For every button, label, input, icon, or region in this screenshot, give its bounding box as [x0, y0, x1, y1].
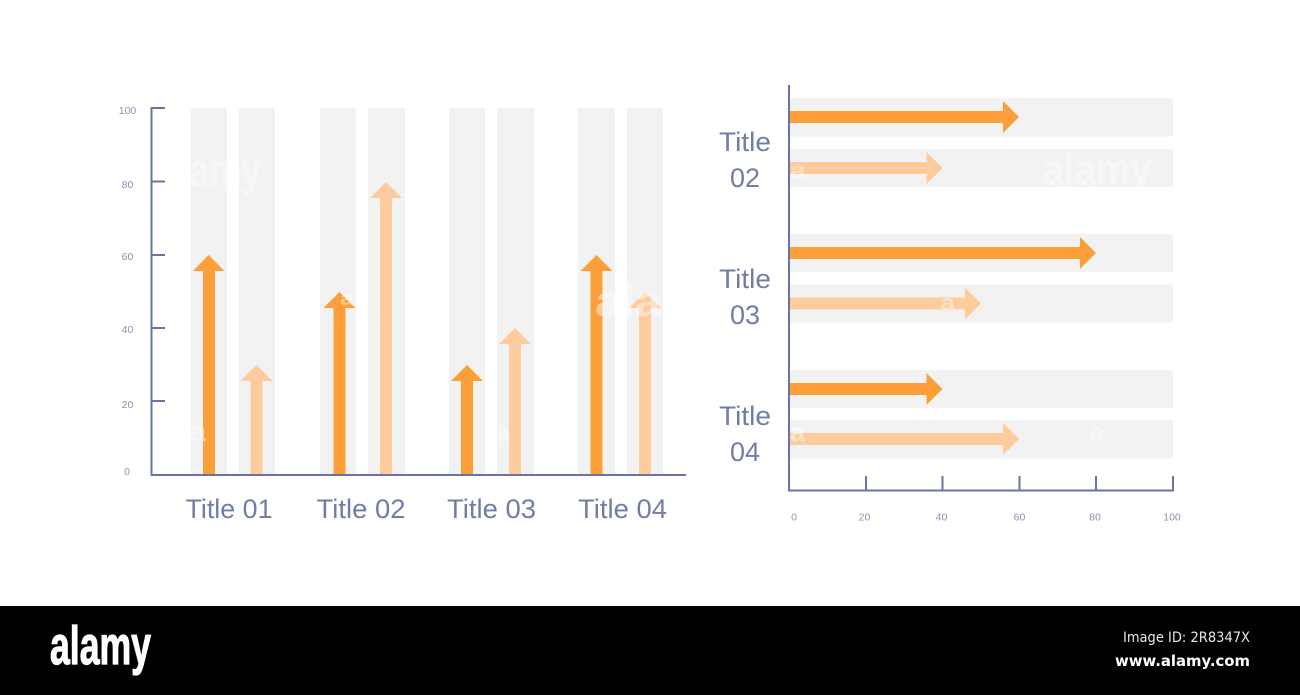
category titles: Title 04: [578, 494, 667, 524]
x axis labels: [791, 512, 1181, 524]
watermark on vertical chart: amy: [190, 144, 261, 196]
x axis labels: 0: [791, 512, 797, 524]
website: www.alamy.com: [1115, 652, 1250, 670]
x axis labels: 40: [936, 512, 947, 524]
x axis labels: 20: [859, 512, 870, 524]
x axis labels: 80: [1089, 512, 1101, 524]
dark orange arrows: [790, 101, 1096, 405]
light orange arrows: [790, 152, 1019, 455]
watermark on horizontal chart: alamy: [1042, 145, 1152, 194]
category titles: [719, 127, 771, 467]
background rows: [789, 98, 1173, 458]
watermark on horizontal chart: a: [940, 290, 956, 315]
watermark on horizontal chart: a: [790, 417, 806, 447]
y axis labels: 60: [122, 251, 133, 263]
axes: [789, 85, 1173, 490]
category titles: Title: [719, 127, 771, 157]
image id: Image ID: 2R8347X: [1123, 630, 1250, 646]
category titles: Title: [719, 264, 771, 294]
category titles: [186, 494, 667, 524]
watermark on horizontal chart: a: [790, 158, 806, 183]
alamy logo: alamy: [50, 616, 151, 676]
category titles: Title 01: [186, 494, 272, 524]
light orange arrows: [240, 182, 661, 474]
watermark on vertical chart: a: [340, 288, 355, 310]
y axis labels: 0: [124, 466, 130, 478]
x axis labels: 100: [1163, 512, 1181, 524]
panel: horizontal arrow chart: [719, 85, 1181, 524]
y axis labels: [119, 105, 136, 478]
dark orange arrows: [193, 255, 612, 474]
y axis: [152, 108, 686, 475]
y axis labels: 100: [119, 105, 136, 117]
watermark on vertical chart: a: [497, 417, 509, 447]
watermark on horizontal chart: [790, 145, 1152, 447]
category titles: 04: [730, 437, 760, 467]
category titles: 02: [730, 163, 760, 193]
category titles: Title 02: [316, 494, 406, 524]
y axis labels: 40: [122, 324, 133, 336]
category titles: Title: [719, 401, 771, 431]
watermark on vertical chart: a: [190, 415, 206, 448]
watermark on vertical chart: [190, 144, 662, 448]
y axis labels: 20: [122, 399, 133, 411]
x axis labels: 60: [1014, 512, 1025, 524]
watermark on vertical chart: ala: [595, 277, 662, 326]
y axis labels: 80: [122, 179, 133, 191]
category titles: Title 03: [447, 494, 536, 524]
footer bar: [0, 606, 1300, 695]
background columns: [191, 108, 663, 474]
panel: vertical arrow chart: [119, 105, 686, 524]
category titles: 03: [730, 300, 760, 330]
watermark on horizontal chart: a: [1090, 417, 1106, 447]
